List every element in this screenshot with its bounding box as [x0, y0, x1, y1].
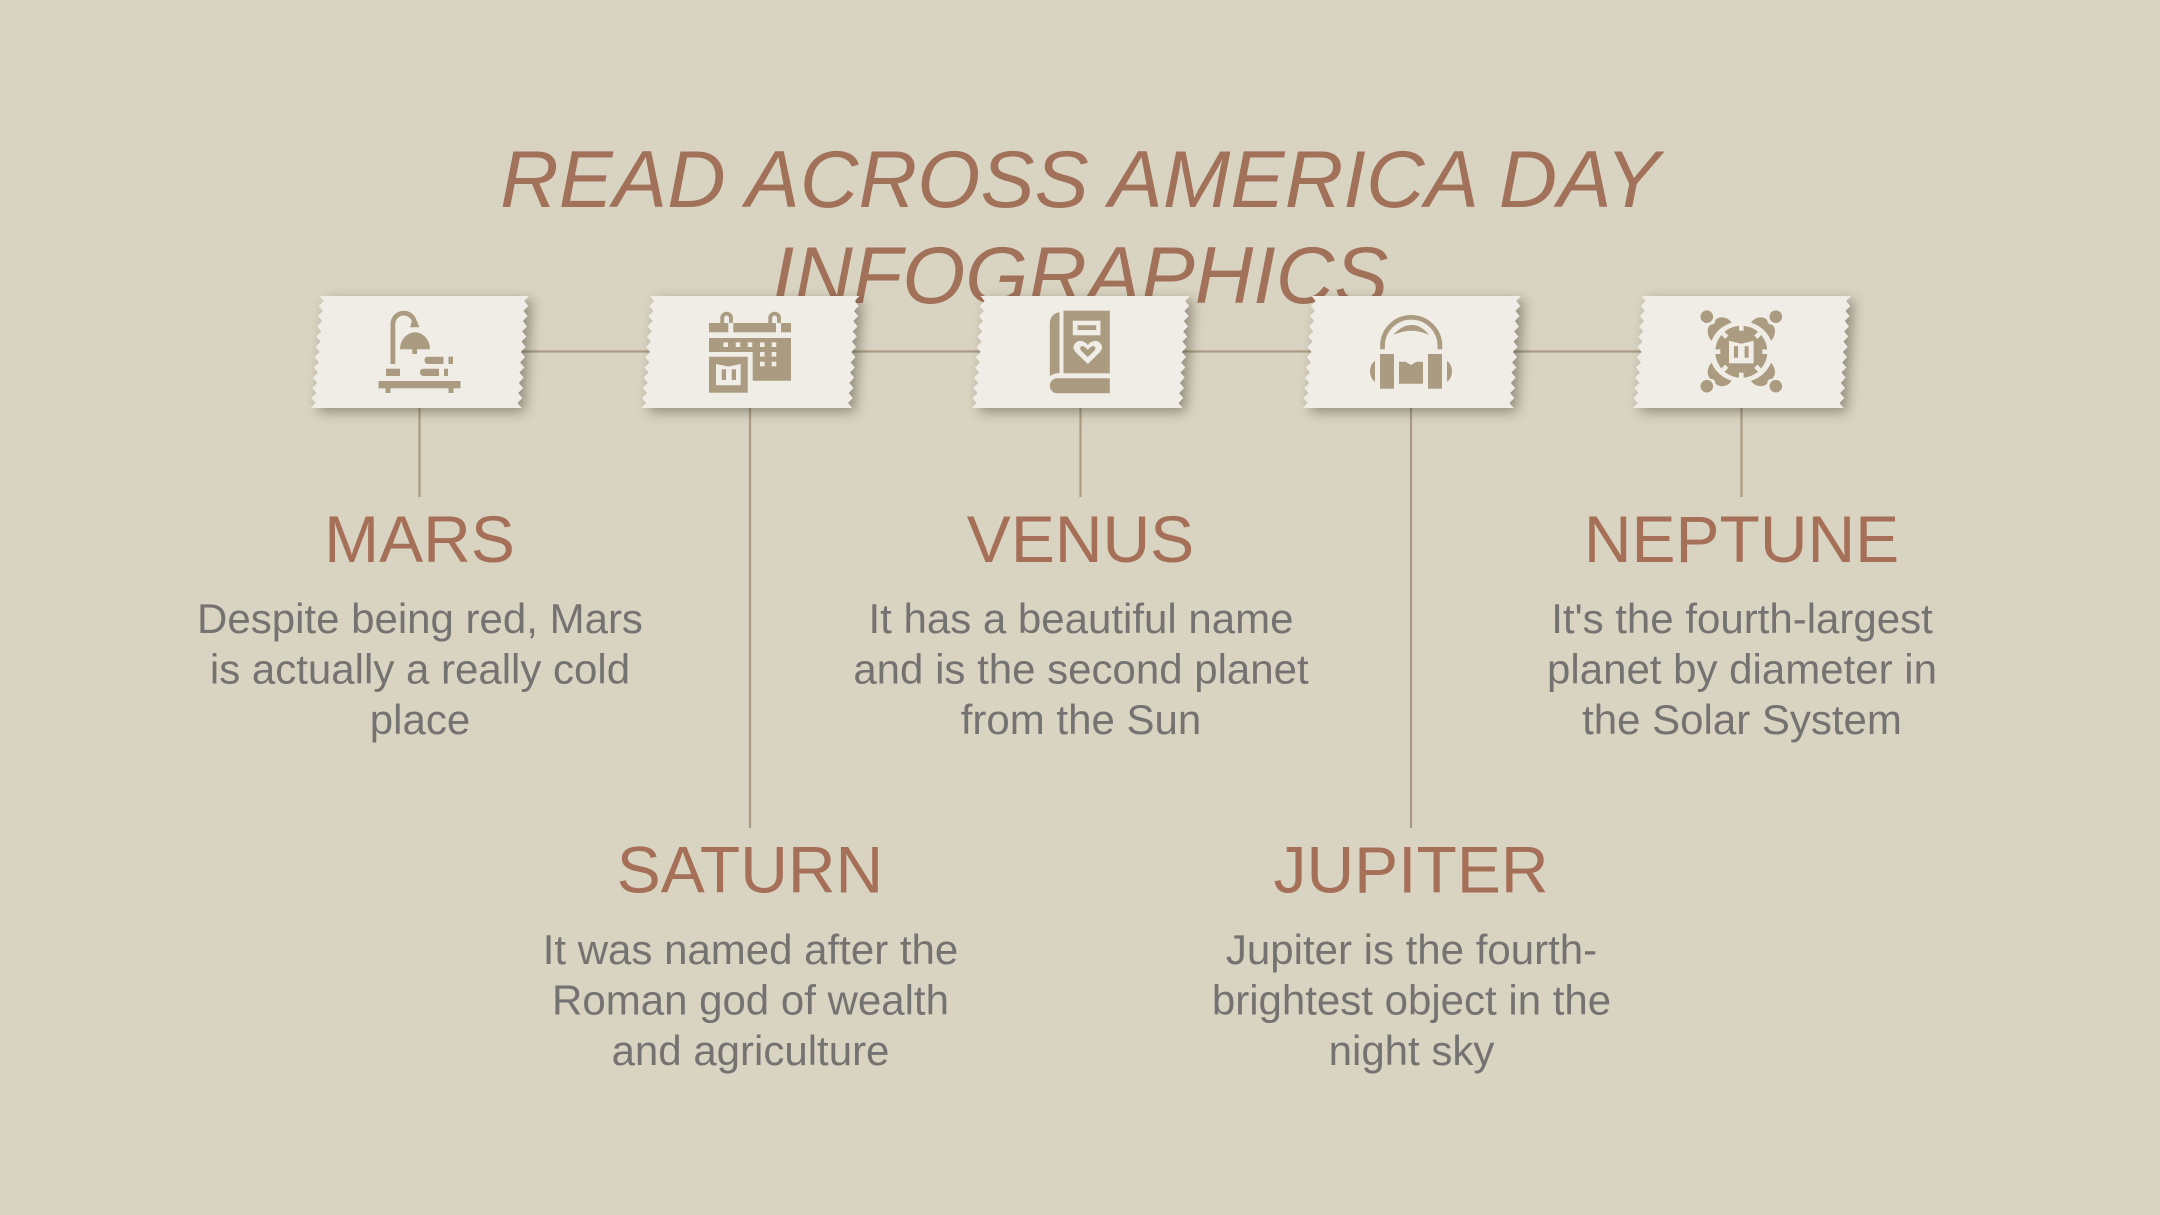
title: INFOGRAPHICS [772, 231, 1388, 321]
text block: Neptune: It's the fourth-largest [1551, 595, 1933, 642]
text block: Mars: Despite being red, Mars [197, 595, 643, 642]
text block: Mars: is actually a really cold [210, 645, 630, 692]
text block: Mars: MARS [324, 502, 515, 576]
text block: Mars [197, 502, 643, 743]
title: READ ACROSS AMERICA DAY [500, 135, 1665, 225]
text block: Venus: VENUS [967, 502, 1194, 576]
vertical connector: Saturn [749, 405, 751, 828]
text block: Saturn: SATURN [617, 832, 883, 906]
text block: Jupiter: JUPITER [1273, 832, 1549, 906]
card: Jupiter headphones [1303, 296, 1521, 408]
vertical connector: Neptune [1740, 405, 1743, 497]
text block: Neptune: planet by diameter in [1547, 645, 1937, 692]
text block: Neptune: NEPTUNE [1584, 502, 1899, 576]
text block: Venus: It has a beautiful name [869, 595, 1293, 642]
icon: calendar with book [709, 314, 791, 393]
icon: desk lamp and books [378, 313, 460, 393]
text block: Jupiter: Jupiter is the fourth- [1226, 926, 1597, 973]
title [500, 135, 1665, 321]
text block: Venus: from the Sun [961, 696, 1201, 743]
text block: Neptune: the Solar System [1582, 696, 1902, 743]
card: Mars lamp and books [311, 296, 529, 408]
vertical connector: Jupiter [1410, 405, 1412, 828]
card: Saturn calendar [641, 296, 860, 408]
icon: people around a book [1700, 310, 1782, 392]
text block: Venus [853, 502, 1309, 743]
text block: Jupiter: night sky [1329, 1027, 1494, 1074]
horizontal connector lines [520, 350, 1650, 353]
vertical connector: Mars [418, 405, 421, 497]
card: Venus book with heart [972, 296, 1190, 408]
icon: headphones with book [1370, 317, 1452, 389]
card: Neptune reading circle [1633, 296, 1851, 408]
icon: book with heart [1050, 311, 1110, 393]
text block: Neptune [1547, 502, 1937, 743]
text block: Saturn: and agriculture [612, 1027, 889, 1074]
text block: Jupiter: brightest object in the [1212, 976, 1611, 1023]
text block: Saturn: Roman god of wealth [552, 976, 949, 1023]
text block: Mars: place [370, 696, 470, 743]
vertical connector: Venus [1079, 405, 1082, 497]
text block: Saturn: It was named after the [543, 926, 958, 973]
text block: Jupiter [1212, 832, 1611, 1074]
text block: Saturn [543, 832, 958, 1074]
text block: Venus: and is the second planet [853, 645, 1309, 692]
